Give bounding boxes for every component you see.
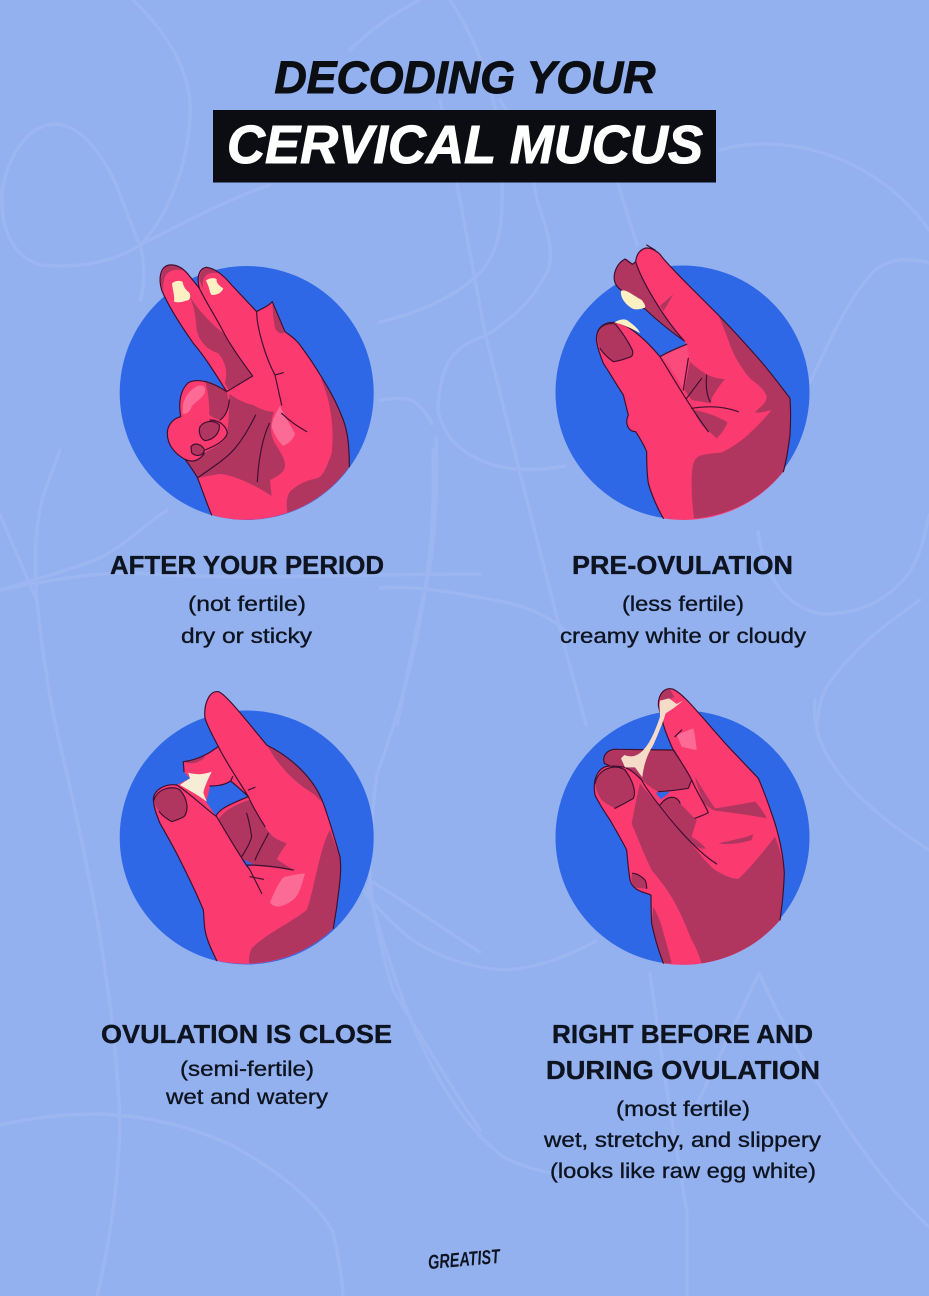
description: wet, stretchy, and slippery xyxy=(543,1129,822,1152)
fertility note: (not fertile) xyxy=(188,593,306,616)
icon: hand with dry mucus on two fingers xyxy=(160,265,349,520)
panel: after your period xyxy=(110,265,384,648)
title line: decoding your: DECODING YOUR xyxy=(274,52,656,103)
panel: ovulation is close xyxy=(101,692,392,1109)
fertility note: (semi-fertile) xyxy=(180,1058,314,1081)
panel: pre-ovulation xyxy=(556,245,810,648)
icon: hand with wet mucus between fingers xyxy=(153,692,341,964)
fertility note: (less fertile) xyxy=(622,593,744,616)
description: dry or sticky xyxy=(181,625,313,648)
description note: (looks like raw egg white) xyxy=(550,1160,816,1183)
title line: cervical mucus: CERVICAL MUCUS xyxy=(227,115,703,175)
heading xyxy=(546,1019,820,1085)
icon: hand stretching egg-white mucus xyxy=(594,689,784,965)
title banner xyxy=(213,110,716,182)
blue circle xyxy=(120,710,374,964)
logo: greatist: GREATIST xyxy=(427,1246,502,1274)
description: creamy white or cloudy xyxy=(560,625,807,648)
title xyxy=(213,52,716,182)
heading line 2: DURING OVULATION xyxy=(546,1055,820,1085)
description: wet and watery xyxy=(165,1086,329,1109)
heading: PRE-OVULATION xyxy=(572,550,793,580)
fertility note: (most fertile) xyxy=(616,1098,750,1121)
blue circle xyxy=(120,266,374,520)
icon: hand with creamy mucus between fingers xyxy=(596,245,791,520)
panel: right before and during ovulation xyxy=(543,689,822,1183)
blue circle xyxy=(556,710,810,964)
heading: AFTER YOUR PERIOD xyxy=(110,550,384,580)
heading: OVULATION IS CLOSE xyxy=(101,1019,392,1049)
blue circle xyxy=(556,266,810,520)
heading line 1: RIGHT BEFORE AND xyxy=(552,1019,813,1049)
